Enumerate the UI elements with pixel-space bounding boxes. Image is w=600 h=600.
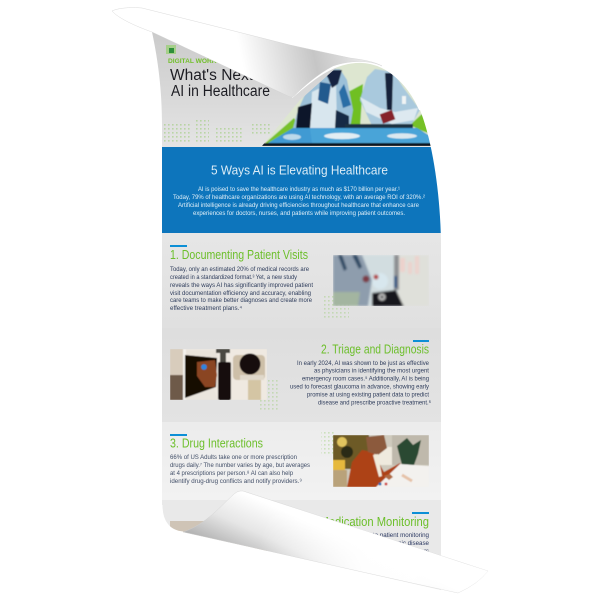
decorative dots bbox=[260, 380, 278, 410]
eyebrow: DIGITAL WORKPLACE bbox=[168, 58, 239, 65]
body 4: and helps doctors bbox=[380, 548, 429, 555]
body 1: effective treatment plans.⁴ bbox=[170, 305, 242, 312]
curl: bottom page fold bbox=[183, 491, 488, 593]
intro heading: 5 Ways AI is Elevating Healthcare bbox=[211, 162, 388, 178]
page edge highlight bbox=[292, 62, 420, 110]
heading 3: 3. Drug Interactions bbox=[170, 436, 263, 450]
photo: patient at eye exam bbox=[170, 349, 267, 400]
body 2 bbox=[290, 360, 431, 406]
body 2: used to forecast glaucoma in advance, showing early bbox=[290, 384, 430, 390]
body 1: care teams to make better diagnoses and create more bbox=[170, 297, 313, 304]
body 1: reveals the ways AI has significantly improved patient bbox=[170, 282, 313, 289]
body 4 bbox=[373, 532, 429, 552]
intro body bbox=[173, 186, 425, 217]
panel: 1 documenting patient visits bbox=[150, 233, 445, 328]
body 2: In early 2024, AI was shown to be just as effective bbox=[297, 360, 430, 367]
panel: 3 drug interactions bbox=[150, 422, 445, 500]
body 2: disease and prescribe proactive treatment.⁶ bbox=[318, 400, 431, 406]
page: infographic sheet bbox=[150, 20, 445, 590]
photo: doctor with tablet bbox=[333, 255, 429, 306]
heading 2: 2. Triage and Diagnosis bbox=[321, 342, 429, 356]
left clinician bbox=[293, 69, 353, 128]
body 2: promise at using existing patient data to predict bbox=[307, 392, 429, 398]
photo: older woman sorting medication bbox=[333, 435, 429, 487]
panel: blue intro band bbox=[150, 147, 445, 234]
body 2: as physicians in identifying the most urgent bbox=[314, 368, 429, 374]
body 1: created in a standardized format.³ Yet, a new study bbox=[170, 274, 298, 281]
title bbox=[170, 68, 270, 96]
title: AI in Healthcare bbox=[171, 83, 270, 100]
decorative dots bbox=[324, 296, 349, 318]
decorative dots bbox=[321, 432, 334, 454]
body 3: 66% of US Adults take one or more prescription bbox=[170, 454, 298, 461]
body 1: visit documentation efficiency and accuracy, enabling bbox=[170, 290, 312, 297]
body 4: AI is also being applied to patient monitoring bbox=[308, 532, 430, 539]
icon: logo badge bbox=[166, 45, 176, 54]
heading 4: 4. Medication Monitoring bbox=[307, 515, 429, 529]
intro body: AI is poised to save the healthcare industry as much as $170 billion per year.¹ bbox=[198, 186, 400, 193]
heading 1: 1. Documenting Patient Visits bbox=[170, 248, 308, 262]
body 3: drugs daily.⁷ The number varies by age, but averages bbox=[170, 462, 310, 469]
page left edge corner bbox=[162, 505, 183, 532]
intro body: experiences for doctors, nurses, and patients while improving patient outcomes. bbox=[193, 210, 405, 217]
body 4: for patients with chronic disease bbox=[341, 540, 430, 547]
photo: fragment bbox=[170, 521, 267, 551]
panel: 4 medication monitoring bbox=[150, 500, 445, 590]
panel: header bbox=[152, 32, 431, 147]
table screen bbox=[268, 128, 433, 143]
intro body: Artificial intelligence is already driving efficiencies throughout healthcare that enhance care bbox=[178, 202, 420, 209]
body 3: at 4 prescriptions per person.⁸ AI can also help bbox=[170, 470, 294, 477]
body 1 bbox=[170, 266, 313, 312]
curl: top page fold bbox=[112, 8, 382, 97]
decorative dots bbox=[164, 120, 270, 142]
body 1: Today, only an estimated 20% of medical records are bbox=[170, 266, 310, 273]
right clinician bbox=[360, 69, 420, 128]
header photo: two clinicians at a screen bbox=[262, 63, 430, 146]
title: What's Next for bbox=[170, 67, 275, 84]
body 3: identify drug-drug conflicts and notify providers.⁹ bbox=[170, 478, 302, 485]
panel: 2 triage and diagnosis bbox=[150, 328, 445, 422]
body 3 bbox=[170, 454, 310, 485]
intro body: Today, 79% of healthcare organizations are using AI technology, with an average ROI of 320%.² bbox=[173, 194, 425, 201]
body 2: emergency room cases.⁵ Additionally, AI is being bbox=[302, 376, 430, 382]
